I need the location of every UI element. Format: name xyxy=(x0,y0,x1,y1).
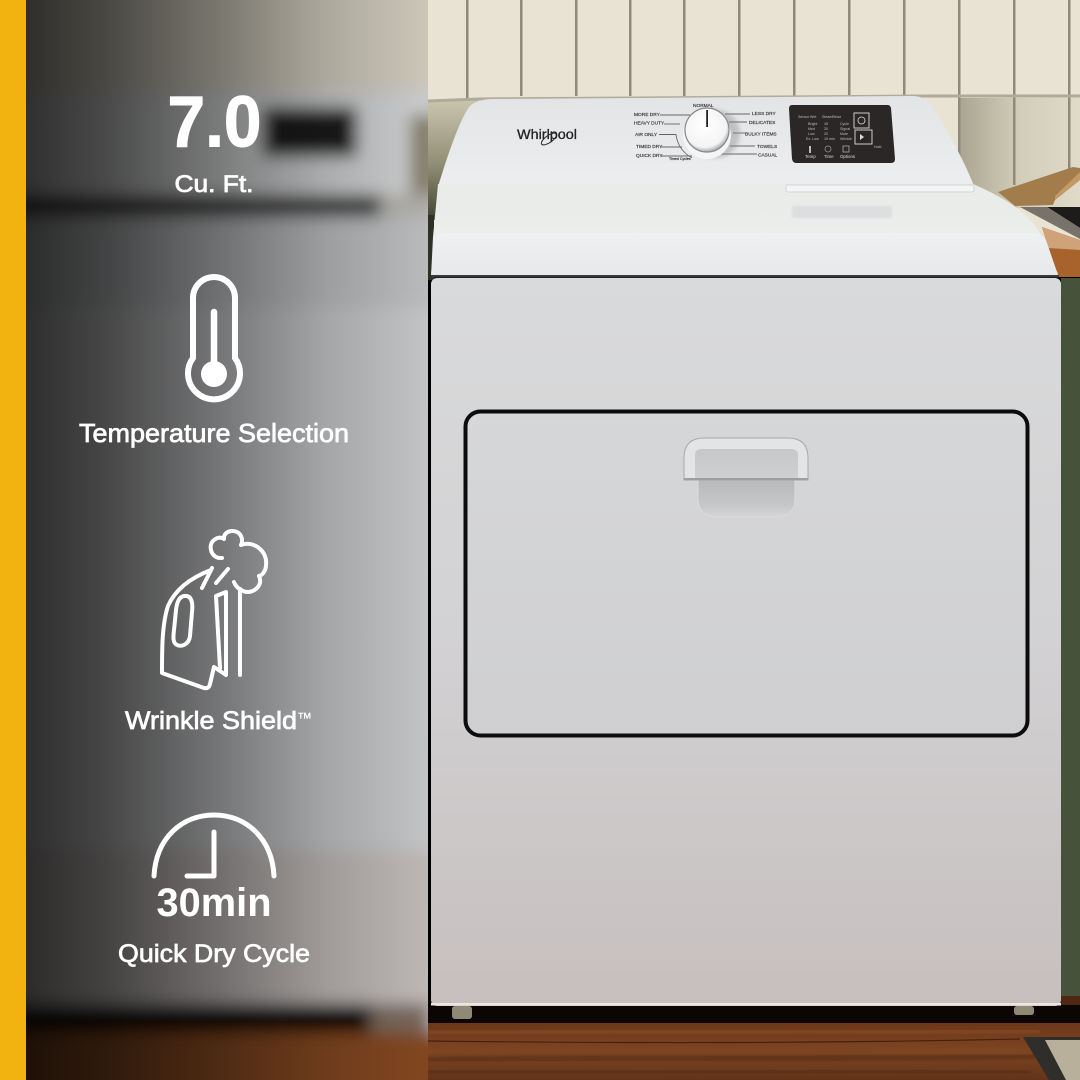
digital control panel: Hold xyxy=(874,145,881,149)
digital control panel: Low xyxy=(808,132,815,136)
yellow accent bar xyxy=(0,0,26,1080)
cycle dial: MORE DRY xyxy=(634,112,661,118)
brand logo: Whirlpool xyxy=(517,127,577,142)
tile wall xyxy=(428,0,1080,280)
label: quick dry cycle: Quick Dry Cycle xyxy=(118,940,310,968)
icon: half clock xyxy=(154,815,274,876)
icon: iron with steam xyxy=(162,531,266,688)
digital control panel: Rinse xyxy=(832,115,841,119)
dryer cabinet xyxy=(431,278,1061,1006)
lid deck xyxy=(431,184,1058,277)
cycle dial: CASUAL xyxy=(758,152,778,158)
digital control panel xyxy=(789,105,895,163)
digital control panel: Wrinkle xyxy=(840,137,852,141)
cycle dial: Timed Cycles xyxy=(669,157,691,161)
cycle dial: HEAVY DUTY xyxy=(634,120,665,126)
quick dry value: 30min xyxy=(156,881,272,925)
cycle dial: NORMAL xyxy=(693,103,714,109)
digital control panel: Steam xyxy=(822,115,832,119)
dryer top console xyxy=(431,96,1059,278)
dryer door xyxy=(466,412,1028,736)
digital control panel: Options xyxy=(840,154,856,159)
digital control panel: Mute xyxy=(840,132,848,136)
digital control panel: Sensor xyxy=(798,115,810,119)
door handle xyxy=(684,438,808,517)
brand logo xyxy=(516,128,576,146)
digital control panel: 30 xyxy=(824,127,828,131)
dryer feet xyxy=(452,1006,1034,1019)
blurred background xyxy=(26,0,428,1080)
cycle dial xyxy=(634,103,778,161)
digital control panel: Temp xyxy=(805,154,816,159)
digital control panel: 45 xyxy=(824,122,828,126)
label: wrinkle shield: Wrinkle Shield xyxy=(125,707,297,735)
lid front lip xyxy=(431,233,1058,275)
counter, sponge and tray xyxy=(998,167,1080,1024)
digital control panel: 20 xyxy=(824,132,828,136)
capacity unit: Cu. Ft. xyxy=(174,171,254,198)
cycle dial: LESS DRY xyxy=(752,111,776,117)
digital control panel: Ex. Low xyxy=(806,137,819,141)
digital control panel: Wet xyxy=(810,115,816,119)
dark gradient overlay xyxy=(26,0,428,1080)
digital control panel: Med xyxy=(808,127,815,131)
feature: capacity xyxy=(168,82,262,198)
digital control panel: Time xyxy=(824,154,834,159)
icon: thermometer xyxy=(188,277,240,399)
panel: blurred feature sidebar xyxy=(26,0,428,1080)
label: wrinkle shield: ™ xyxy=(297,710,312,727)
digital control panel: Bright xyxy=(808,122,817,126)
cycle dial: QUICK DRY xyxy=(636,153,663,159)
cycle dial: TOWELS xyxy=(757,144,777,150)
capacity value: 7.0 xyxy=(168,82,262,162)
photo: dryer in laundry room xyxy=(428,0,1080,1080)
digital control panel: Cycle xyxy=(840,122,849,126)
label: temperature selection: Temperature Selection xyxy=(79,418,349,448)
floor xyxy=(428,1005,1080,1080)
cycle dial: DELICATES xyxy=(749,120,775,126)
cycle dial: AIR ONLY xyxy=(635,132,658,138)
cycle dial: BULKY ITEMS xyxy=(745,132,777,138)
cycle dial: TIMED DRY xyxy=(636,144,663,150)
digital control panel: 15 min xyxy=(824,137,835,141)
digital control panel: Signal xyxy=(840,127,850,131)
